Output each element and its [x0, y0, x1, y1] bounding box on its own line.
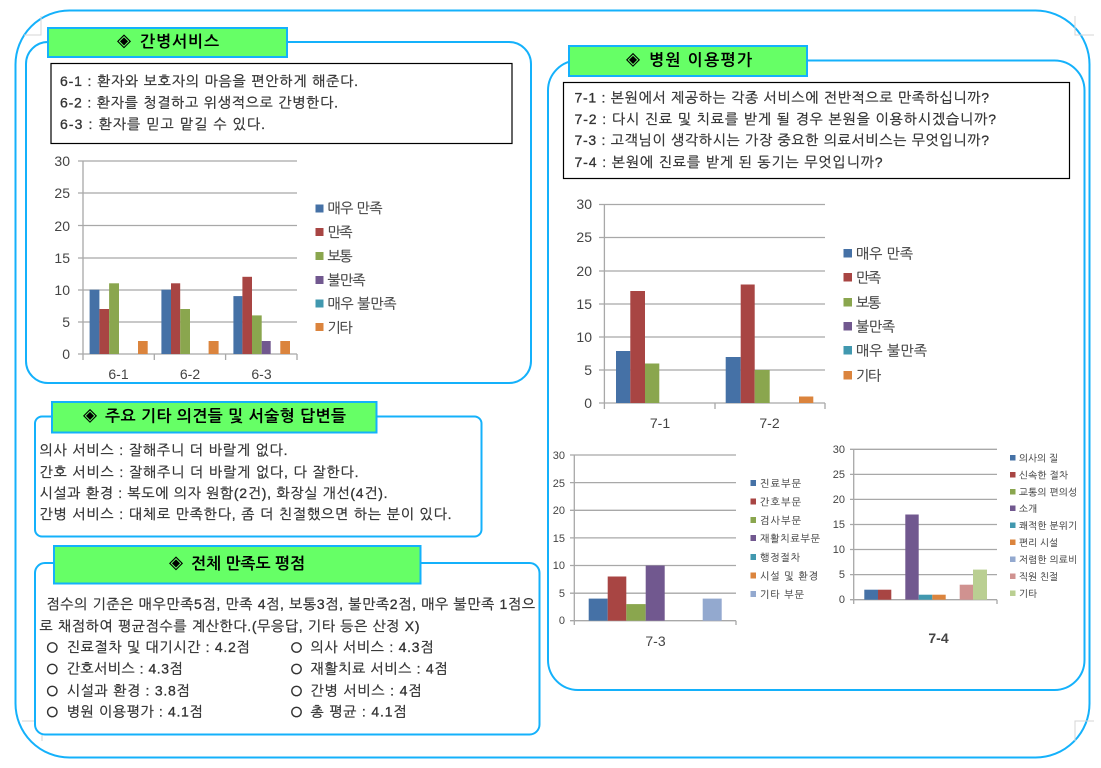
bar chart: 7-3: 30 — [553, 450, 565, 462]
text block: opinions: 간병 서비스 : 대체로 만족한다, 좀 더 친절했으면 하는 분이 있다. — [40, 506, 452, 522]
bar chart: 7-3 — [553, 450, 821, 649]
bar chart: 7-3: 7-3 — [645, 633, 666, 649]
legend: 기타 — [328, 320, 352, 336]
list: scores left: 진료절차 및 대기시간 : 4.2점 — [67, 639, 250, 655]
bar chart: 6-1 to 6-3: 5 — [62, 314, 70, 330]
heading: nursing service: 간병서비스 — [140, 33, 219, 51]
bar chart: 7-4: 0 — [839, 594, 845, 606]
bar chart: 7-4: 25 — [833, 469, 845, 481]
legend: 쾌적한 분위기 — [1019, 520, 1077, 532]
bar chart: 7-1 and 7-2 — [576, 196, 927, 431]
legend: 진료부문 — [760, 478, 802, 490]
list: scores left: 간호서비스 : 4.3점 — [67, 660, 183, 676]
heading: overall satisfaction — [54, 546, 420, 584]
list: scores right: 의사 서비스 : 4.3점 — [310, 639, 434, 655]
bar chart: 6-1 to 6-3: 15 — [54, 250, 70, 266]
legend: 신속한 절차 — [1019, 470, 1068, 482]
legend: 재활치료부문 — [760, 533, 821, 545]
bar chart: 7-1 and 7-2: 7-2 — [759, 415, 780, 431]
heading: nursing service: ◈ — [116, 34, 132, 51]
legend: 매우 불만족 — [856, 342, 927, 358]
bar chart: 6-1 to 6-3: 6-1 — [108, 366, 129, 382]
bar chart: 7-3: 20 — [553, 505, 565, 517]
text block: scoring basis — [40, 596, 535, 634]
heading: hospital use evaluation: ◈ — [625, 52, 641, 70]
bar chart: 6-1 to 6-3: 6-2 — [180, 366, 200, 382]
text block: questions 6: 6-2 : 환자를 청결하고 위생적으로 간병한다. — [60, 94, 338, 110]
bar chart: 7-4: 15 — [833, 519, 845, 531]
bar chart: 6-1 to 6-3: 6-3 — [251, 366, 272, 382]
bar chart: 7-4: 5 — [839, 569, 845, 581]
heading: overall satisfaction: 전체 만족도 평점 — [191, 555, 305, 573]
legend: 소개 — [1019, 504, 1037, 515]
bar chart: 7-1 and 7-2: 0 — [584, 395, 592, 411]
heading: hospital use evaluation — [569, 46, 807, 76]
panel: other opinions — [35, 402, 482, 536]
list: scores right: 간병 서비스 : 4점 — [310, 682, 422, 698]
bar chart: 6-1 to 6-3: 0 — [62, 346, 70, 362]
bar chart: 7-3: 10 — [553, 560, 565, 572]
text block: questions 7: 7-3 : 고객님이 생각하시는 가장 중요한 의료서비스는 무엇입니까? — [574, 132, 989, 148]
panel: overall satisfaction — [35, 546, 540, 734]
bar chart: 7-4: 20 — [833, 494, 845, 506]
panel: hospital use evaluation — [548, 46, 1084, 690]
list: scores right — [292, 639, 448, 720]
bar chart: 7-1 and 7-2: 25 — [576, 229, 592, 245]
legend: 기타 — [856, 368, 881, 384]
bar chart: 7-3: 15 — [553, 533, 565, 545]
legend: 만족 — [856, 270, 881, 286]
text block: questions 6: 6-1 : 환자와 보호자의 마음을 편안하게 해준다. — [60, 73, 358, 89]
text block: questions 6: 6-3 : 환자를 믿고 맡길 수 있다. — [60, 116, 265, 132]
heading: overall satisfaction: ◈ — [168, 556, 184, 573]
panel: nursing service — [26, 28, 531, 383]
bar chart: 7-4: 7-4 — [928, 630, 949, 646]
legend — [316, 200, 396, 336]
list: scores right: 총 평균 : 4.1점 — [310, 704, 406, 720]
text block: questions 7 — [564, 82, 1070, 178]
legend: 편리 시설 — [1019, 538, 1058, 549]
text block: opinions: 시설과 환경 : 복도에 의자 원함(2건), 화장실 개선(4건). — [40, 485, 388, 501]
legend: 보통 — [856, 294, 881, 310]
legend: 행정절차 — [760, 552, 801, 564]
heading: nursing service — [48, 28, 287, 57]
text block: opinions — [40, 442, 452, 522]
legend: 간호부문 — [760, 496, 802, 508]
legend: 불만족 — [328, 272, 366, 288]
bar chart: 7-1 and 7-2: 10 — [576, 329, 592, 345]
text block: questions 7: 7-4 : 본원에 진료를 받게 된 동기는 무엇입니까? — [574, 154, 883, 170]
bar chart: 6-1 to 6-3: 30 — [54, 153, 70, 169]
legend: 매우 불만족 — [328, 296, 396, 312]
bar chart: 7-4: 10 — [833, 544, 845, 556]
legend: 매우 만족 — [856, 246, 913, 262]
bar chart: 6-1 to 6-3: 20 — [54, 218, 70, 234]
text block: opinions: 의사 서비스 : 잘해주니 더 바랄게 없다. — [40, 442, 288, 458]
list: scores left: 병원 이용평가 : 4.1점 — [67, 704, 203, 720]
bar chart: 7-1 and 7-2: 15 — [576, 296, 592, 312]
bar chart: 6-1 to 6-3 — [54, 153, 396, 382]
legend: 기타 부문 — [760, 589, 805, 601]
bar chart: 7-3: 5 — [559, 588, 565, 600]
text block: scoring basis: 로 채점하여 평균점수를 계산한다.(무응답, 기타 등은 산정 X) — [40, 618, 420, 634]
legend: 만족 — [328, 224, 352, 240]
bar chart: 7-4 — [833, 444, 1077, 646]
legend — [844, 246, 927, 384]
heading: hospital use evaluation: 병원 이용평가 — [649, 52, 753, 70]
heading: other opinions: ◈ — [82, 408, 98, 426]
legend: 보통 — [328, 248, 352, 264]
list: scores left — [48, 639, 250, 720]
text block: questions 7: 7-1 : 본원에서 제공하는 각종 서비스에 전반적으로 만족하십니까? — [574, 90, 989, 106]
list: scores left: 시설과 환경 : 3.8점 — [67, 682, 190, 698]
legend: 직원 친절 — [1019, 571, 1058, 583]
legend: 시설 및 환경 — [760, 570, 818, 582]
heading: other opinions — [52, 402, 376, 432]
text block: questions 6 — [51, 64, 512, 144]
text block: opinions: 간호 서비스 : 잘해주니 더 바랄게 없다, 다 잘한다. — [40, 464, 358, 480]
bar chart: 7-4: 30 — [833, 444, 845, 456]
bar chart: 7-3: 0 — [559, 615, 565, 627]
bar chart: 6-1 to 6-3: 25 — [54, 185, 70, 201]
bar chart: 7-3: 25 — [553, 478, 565, 490]
bar chart: 7-1 and 7-2: 20 — [576, 263, 592, 279]
legend: 교통의 편의성 — [1019, 488, 1077, 498]
legend — [750, 478, 821, 601]
legend: 의사의 질 — [1019, 454, 1058, 464]
bar chart: 7-1 and 7-2: 7-1 — [650, 415, 670, 431]
bar chart: 6-1 to 6-3: 10 — [54, 282, 70, 298]
legend: 매우 만족 — [328, 200, 382, 216]
text block: questions 7: 7-2 : 다시 진료 및 치료를 받게 될 경우 본원을 이용하시겠습니까? — [574, 111, 996, 127]
legend: 저렴한 의료비 — [1019, 555, 1077, 566]
heading: other opinions: 주요 기타 의견들 및 서술형 답변들 — [105, 408, 346, 426]
legend: 기타 — [1019, 589, 1038, 600]
legend — [1010, 454, 1077, 600]
legend: 불만족 — [856, 318, 895, 334]
bar chart: 7-1 and 7-2: 30 — [576, 196, 592, 212]
legend: 검사부문 — [760, 515, 802, 527]
list: scores right: 재활치료 서비스 : 4점 — [310, 660, 448, 676]
bar chart: 7-1 and 7-2: 5 — [584, 362, 592, 378]
text block: scoring basis: 점수의 기준은 매우만족5점, 만족 4점, 보통3점, 불만족2점, 매우 불만족 1점으 — [46, 596, 535, 612]
